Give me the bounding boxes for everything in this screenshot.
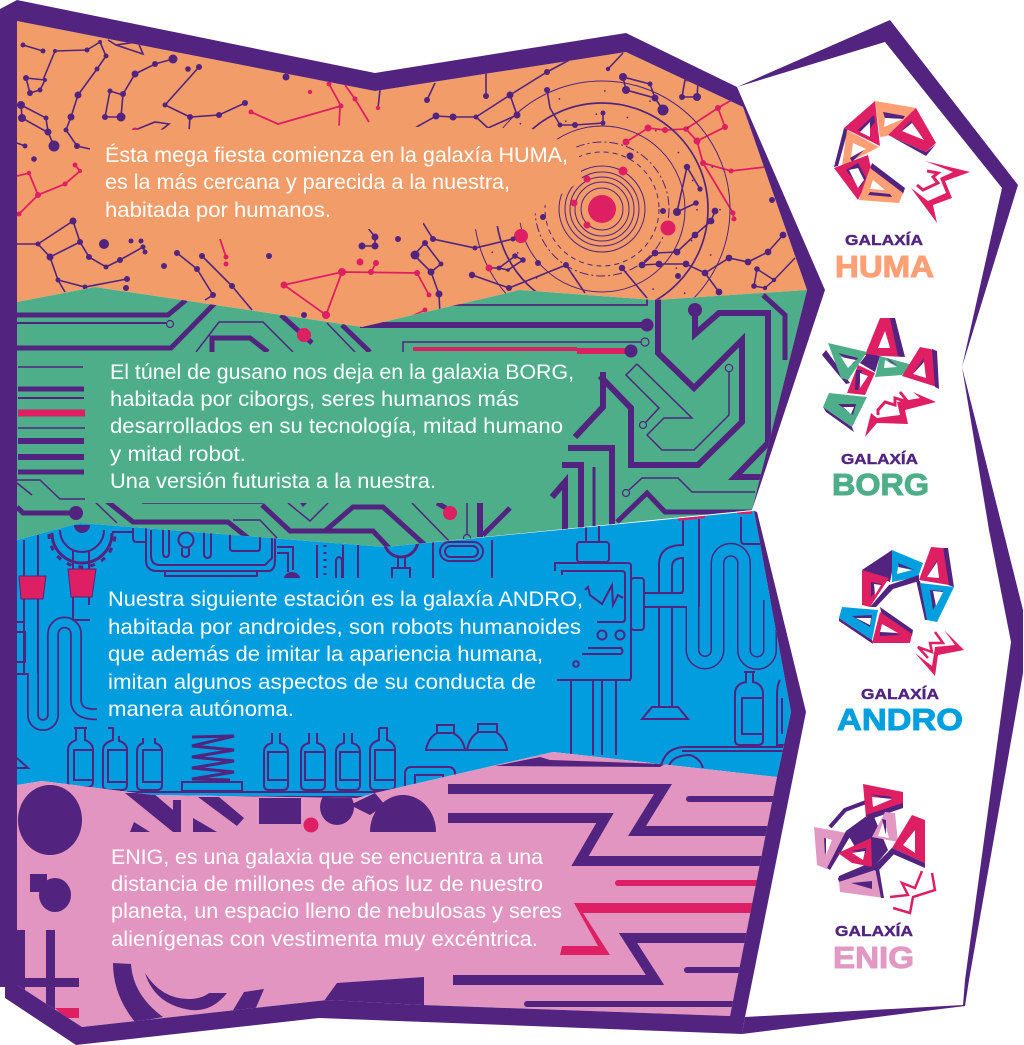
text block: BORG: desarrollados en su tecnología, mitad humano [110,415,563,438]
label: GALAXÍA ANDRO: GALAXÍA [861,686,939,703]
text block: ANDRO: imitan algunos aspectos de su conducta de [108,671,536,694]
text block: ANDRO: manera autónoma. [108,698,294,721]
panel: HUMA constellations [17,21,807,327]
frame: right outline band [737,20,1023,1034]
text block: HUMA: Ésta mega fiesta comienza en la galaxía HUMA, [105,144,568,167]
icon: pink cups [19,569,96,599]
icon: gear [49,525,146,569]
panel: BORG text background [85,352,597,503]
icon: control box [146,530,275,576]
text block: HUMA: es la más cercana y parecida a la nuestra, [105,171,510,194]
icon: pipes right [659,517,770,663]
logo: BORG: BORG [832,467,929,502]
label: GALAXÍA BORG: GALAXÍA [841,451,918,468]
icon: spring [182,736,242,791]
text block: ANDRO [108,588,583,721]
icon: machine screen [557,585,631,680]
logo: BORG [822,318,939,502]
panel: ANDRO machinery [17,511,791,798]
text block: BORG: Una versión futurista a la nuestra. [110,470,436,493]
text block: HUMA [105,144,568,222]
text block: ENIG: ENIG, es una galaxia que se encuentra a una [111,846,543,869]
panel: HUMA text background [90,122,582,238]
text block: ANDRO: habitada por androides, son robots humanoides [108,616,581,639]
text block: ENIG [111,846,562,951]
panel: BORG circuits [17,287,807,547]
icon: machine [555,525,698,680]
label: GALAXÍA ENIG: GALAXÍA [835,923,913,940]
text block: ENIG: planeta, un espacio lleno de nebulosas y seres [111,900,562,923]
text block: ENIG: distancia de millones de años luz de nuestro [111,873,543,896]
logo: ANDRO [837,547,964,737]
icon: orbital rings [475,80,730,300]
text block: BORG: El túnel de gusano nos deja en la galaxia BORG, [110,361,574,384]
icon: bells [426,724,507,750]
logo: ANDRO: ANDRO [837,702,963,737]
text block: BORG: habitada por ciborgs, seres humanos más [110,388,519,411]
panel: ENIG shapes [17,752,777,1027]
logo: ENIG: ENIG [833,940,914,975]
label: GALAXÍA HUMA: GALAXÍA [845,232,923,249]
icon: bottles [68,672,790,790]
text block: ANDRO: que además de imitar la apariencia humana, [108,643,543,666]
panel: ANDRO text background [97,578,586,722]
text block: BORG [110,361,574,493]
text block: BORG: y mitad robot. [110,443,246,466]
logo: HUMA: HUMA [835,249,934,284]
logo: ENIG [814,784,935,975]
text block: ANDRO: Nuestra siguiente estación es la galaxía ANDRO, [108,588,583,611]
logo: HUMA [834,101,970,284]
icon: BORG circuit overlap [550,406,606,530]
text block: HUMA: habitada por humanos. [105,199,331,222]
icon: pipes left [33,622,100,725]
text block: ENIG: alienígenas con vestimenta muy excéntrica. [111,928,538,951]
